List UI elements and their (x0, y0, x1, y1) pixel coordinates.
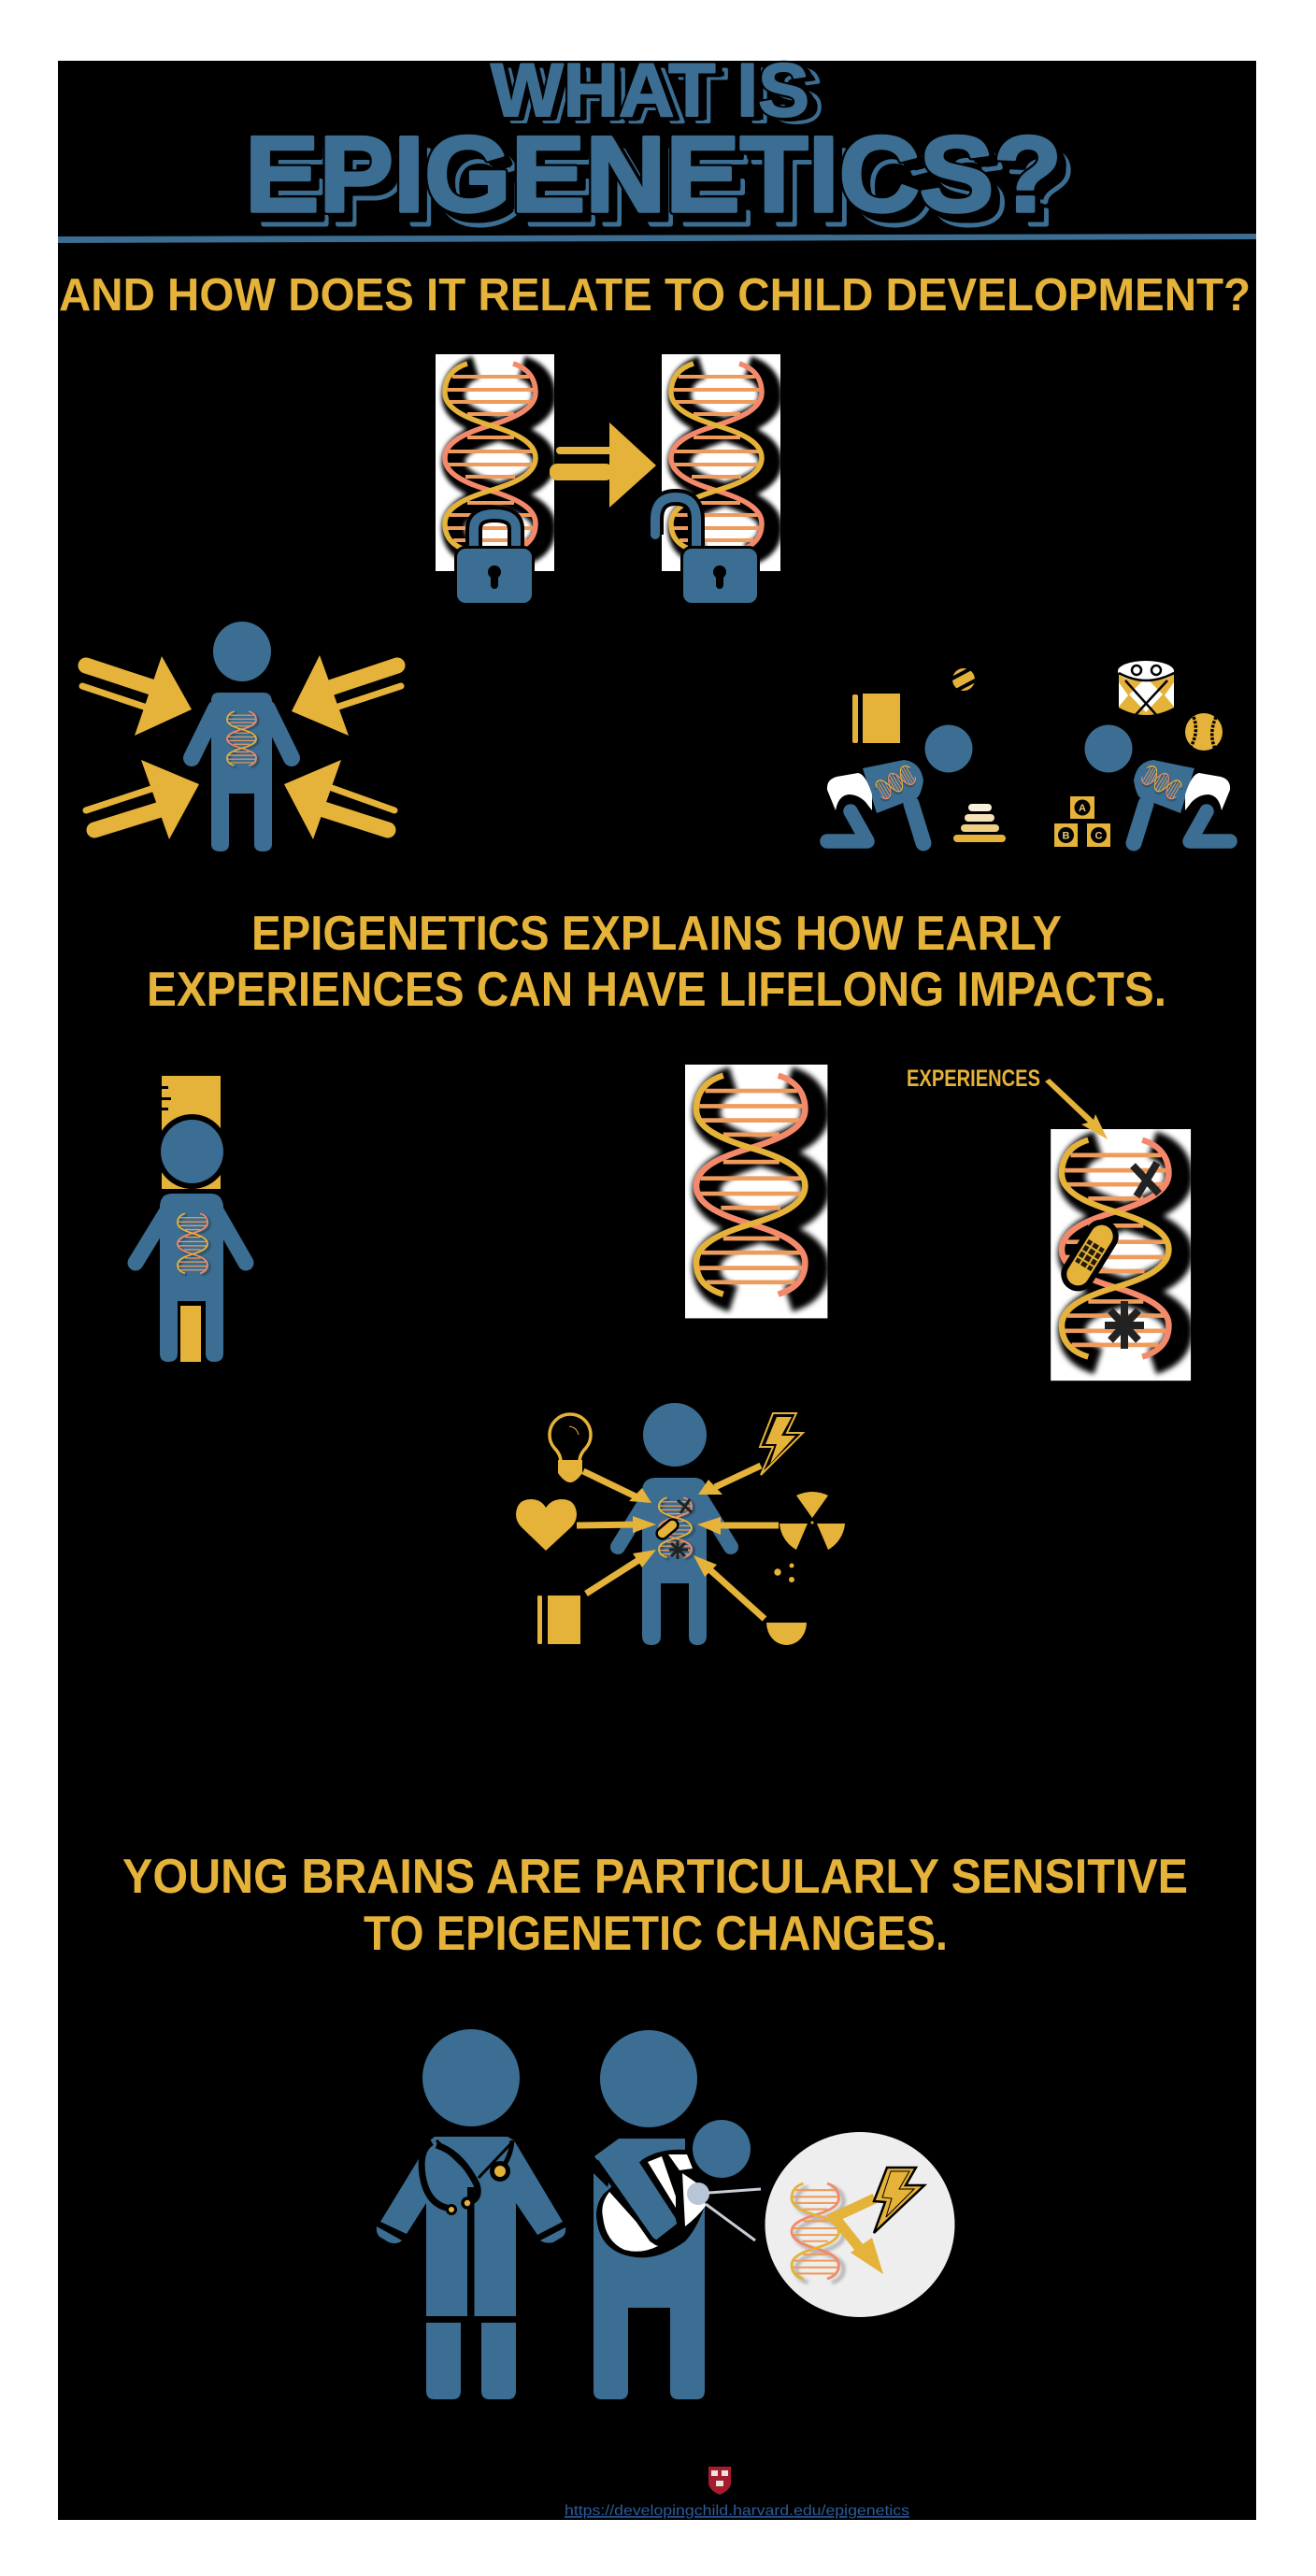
callout: dna change (765, 2132, 955, 2317)
title line: what is: WHAT IS (498, 54, 822, 138)
baby right (1084, 725, 1230, 843)
icon: light bulb (550, 1414, 591, 1482)
babies playing (827, 661, 1230, 847)
person figure (192, 622, 292, 852)
icon: ruler (162, 1076, 221, 1189)
label: experiences (907, 1066, 1108, 1139)
title line: epigenetics: EPIGENETICS? (245, 115, 1062, 235)
dna locked to unlocked diagram (436, 354, 780, 603)
arrow: bottom left (86, 760, 199, 839)
heading: early experiences: EPIGENETICS EXPLAINS HOW EARLY (251, 907, 1062, 961)
icon: radiation (780, 1492, 845, 1550)
label: experiences: EXPERIENCES (907, 1066, 1040, 1092)
heading: early experiences (147, 907, 1166, 1017)
icon: heart (516, 1499, 577, 1551)
icon: book (852, 694, 900, 743)
dna with open lock (655, 354, 780, 603)
doctor figure (377, 2029, 565, 2399)
heading: young brains: YOUNG BRAINS ARE PARTICULARLY SENSITIVE (122, 1850, 1188, 1904)
person with four incoming arrows (82, 622, 401, 852)
arrow: locked to unlocked (550, 422, 656, 508)
title line: epigenetics: EPIGENETICS? (249, 119, 1066, 238)
icon: stacking rings (953, 804, 1006, 842)
dna strand (792, 2183, 843, 2283)
title line: epigenetics: EPIGENETICS? (245, 115, 1062, 235)
icon: lightning bolt (760, 1413, 803, 1475)
stethoscope (422, 2140, 512, 2213)
baby left (827, 725, 972, 843)
person with six influences (516, 1403, 845, 1645)
title line: what is: WHAT IS (491, 49, 809, 133)
title (245, 49, 1075, 248)
arrows into the body (577, 1466, 779, 1619)
icon: chemical bowl (766, 1563, 807, 1645)
icon: book (537, 1596, 580, 1644)
heading: early experiences: EXPERIENCES CAN HAVE LIFELONG IMPACTS. (147, 963, 1166, 1017)
source link: https://developingchild.harvard.edu/epigenetics (565, 2503, 909, 2519)
callout lines (706, 2189, 761, 2240)
icon: asterisk (1105, 1301, 1144, 1349)
icon: alphabet blocks: A (1079, 803, 1086, 814)
icon: lightning bolt (874, 2168, 924, 2233)
dna with experiences (1051, 1129, 1191, 1381)
title line: what is: WHAT IS (494, 51, 816, 136)
title line: what is: WHAT IS (491, 49, 809, 133)
title line: epigenetics: EPIGENETICS? (256, 128, 1075, 248)
title line: epigenetics: EPIGENETICS? (252, 123, 1070, 243)
arrow: top left (82, 656, 192, 736)
icon: striped ball (946, 665, 981, 694)
subtitle: AND HOW DOES IT RELATE TO CHILD DEVELOPMENT? (59, 270, 1251, 321)
icon: alphabet blocks: C (1095, 830, 1103, 841)
person with ruler (136, 1076, 246, 1362)
magnifier spot (687, 2182, 709, 2205)
logo: harvard crest (708, 2467, 731, 2495)
dna strand (1051, 1129, 1191, 1381)
baby in arms (594, 2117, 753, 2257)
dna large (685, 1065, 827, 1318)
icon: alphabet blocks (1054, 796, 1110, 847)
person figure (618, 1403, 731, 1645)
heading: young brains: TO EPIGENETIC CHANGES. (364, 1907, 948, 1961)
dna with marks (654, 1497, 694, 1559)
dna with closed lock (436, 354, 554, 603)
icon: alphabet blocks: B (1063, 830, 1070, 841)
icon: x mark (1133, 1163, 1159, 1196)
heading: young brains (122, 1850, 1188, 1961)
child figure (136, 1114, 246, 1362)
arrow: top right (292, 655, 401, 736)
arrow: deflected (835, 2198, 883, 2274)
icon: drum (1118, 661, 1174, 718)
icon: baseball (1185, 713, 1223, 751)
arrow: bottom right (284, 760, 394, 839)
icon: bandage (1059, 1217, 1121, 1294)
parent holding baby (594, 2030, 753, 2399)
